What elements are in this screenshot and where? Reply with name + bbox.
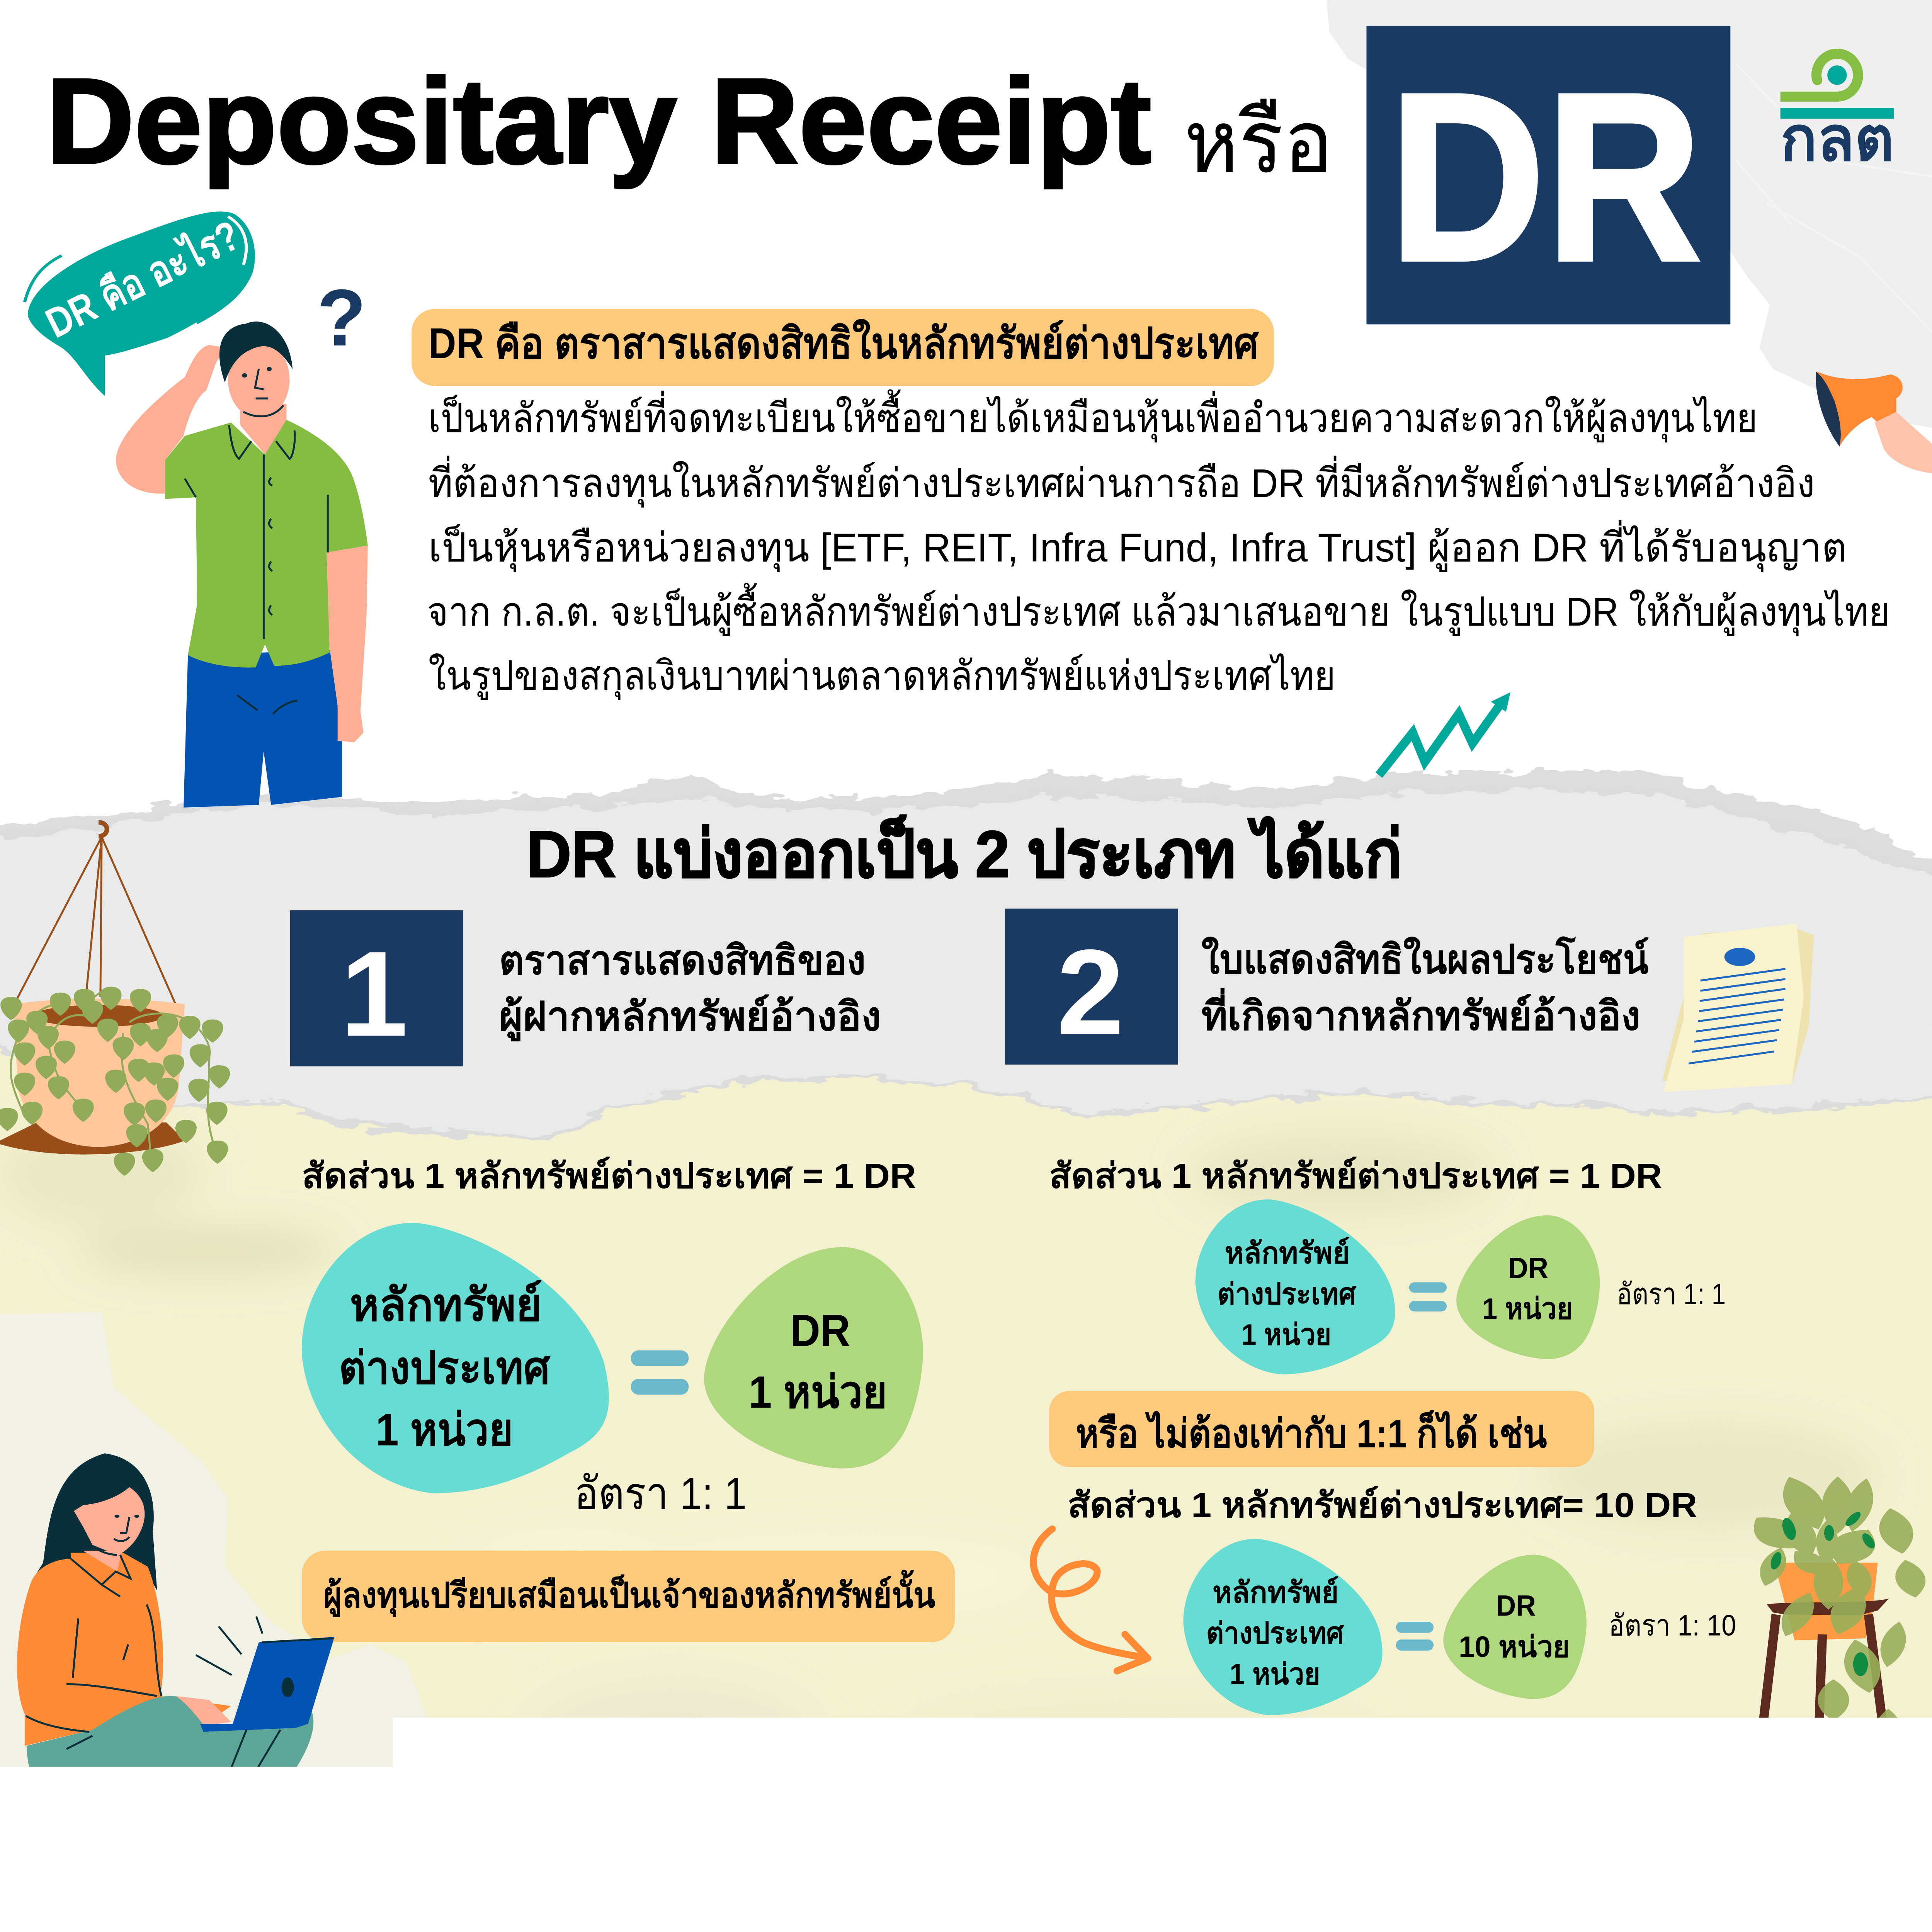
- type 2: ใบแสดงสิทธิในผลประโยชน์: [1201, 936, 1649, 982]
- blob: foreign security: ต่างประเทศ: [1206, 1617, 1344, 1650]
- blob: DR: DR: [790, 1305, 850, 1356]
- icon: facebook: [737, 1878, 774, 1925]
- equals sign: [1409, 1282, 1447, 1311]
- title: Depositary Receipt: [46, 53, 1151, 190]
- definition paragraph: เป็นหลักทรัพย์ที่จดทะเบียนให้ซื้อขายได้เหมือนหุ้นเพื่ออำนวยความสะดวกให้ผู้ลงทุนไทย: [429, 389, 1758, 443]
- type 2: [1005, 909, 1649, 1065]
- character: woman with laptop: [17, 1453, 335, 1869]
- footer bar: [11, 1872, 1921, 1932]
- ratio label: อัตรา 1: 10: [1609, 1609, 1736, 1642]
- type 2: ที่เกิดจากหลักทรัพย์อ้างอิง: [1201, 988, 1641, 1039]
- SEC logo: กลต: [1781, 105, 1894, 174]
- large diagram: 1 security = 1 DR: [302, 1223, 923, 1519]
- icon: facebook: f: [747, 1878, 761, 1925]
- footer: hotline: 1207: [1811, 1885, 1880, 1921]
- heading pill: what is DR: DR คือ ตราสารแสดงสิทธิในหลักทรัพย์ต่างประเทศ: [429, 319, 1259, 367]
- blob: foreign security: [1183, 1539, 1383, 1715]
- icon: potted plant on stand: [1741, 1473, 1930, 1877]
- definition paragraph: [427, 389, 1890, 701]
- blob: foreign security: 1 หน่วย: [1242, 1318, 1331, 1351]
- icon: phone: [1770, 1888, 1794, 1915]
- callout: or not 1:1: หรือ ไม่ต้องเท่ากับ 1:1 ก็ได้ เช่น: [1076, 1410, 1547, 1456]
- ratio label: อัตรา 1: 1: [574, 1468, 747, 1519]
- blob: DR: 1 หน่วย: [749, 1367, 887, 1417]
- type 1: ผู้ฝากหลักทรัพย์อ้างอิง: [499, 994, 881, 1042]
- type 1: ตราสารแสดงสิทธิของ: [499, 938, 866, 983]
- definition paragraph: ในรูปของสกุลเงินบาทผ่านตลาดหลักทรัพย์แห่งประเทศไทย: [429, 654, 1336, 701]
- small diagram: ratio 1:10: [1183, 1539, 1736, 1715]
- footer: website: www.smarttoinvest.com: [1386, 1887, 1752, 1920]
- definition paragraph: เป็นหุ้นหรือหน่วยลงทุน [ETF, REIT, Infra Fund, Infra Trust] ผู้ออก DR ที่ได้รับอนุญาต: [429, 520, 1847, 572]
- type 2: 2: [1056, 924, 1124, 1060]
- ratio heading left: สัดส่วน 1 หลักทรัพย์ต่างประเทศ = 1 DR: [302, 1156, 916, 1196]
- equals sign: [631, 1350, 689, 1395]
- heading pill: what is DR: [412, 309, 1274, 386]
- footer: facebook page: สำนักงาน กลต.: [794, 1886, 958, 1918]
- SEC logo: [1781, 54, 1894, 174]
- callout: investor not owner: [967, 1720, 1862, 1845]
- callout: investor is like owner: [302, 1551, 955, 1642]
- blob: DR: 10 หน่วย: [1459, 1631, 1570, 1663]
- icon: growth arrow: [1379, 692, 1510, 775]
- footer: organisation name: สำนักงานคณะกรรมการกำกับหลักทรัพย์และตลาดหลักทรัพย์: [46, 1884, 691, 1916]
- blob: foreign security: หลักทรัพย์: [1225, 1236, 1350, 1270]
- blob: DR: DR: [1508, 1252, 1548, 1284]
- cream paper background: [0, 1040, 1932, 1932]
- torn grey paper band: [0, 770, 1932, 1139]
- definition paragraph: ที่ต้องการลงทุนในหลักทรัพย์ต่างประเทศผ่านการถือ DR ที่มีหลักทรัพย์ต่างประเทศอ้างอิง: [429, 456, 1815, 508]
- ratio heading right: สัดส่วน 1 หลักทรัพย์ต่างประเทศ = 1 DR: [1049, 1156, 1662, 1196]
- blob: foreign security: [1196, 1199, 1395, 1374]
- footer: start to invest: Start-to-invest: [1065, 1889, 1276, 1920]
- callout: investor is like owner: ผู้ลงทุนเปรียบเสมือนเป็นเจ้าของหลักทรัพย์นั้น: [323, 1570, 935, 1617]
- icon: document: [1662, 923, 1814, 1092]
- blob: DR: [704, 1247, 923, 1468]
- blob: DR: [1443, 1554, 1587, 1699]
- blob: foreign security: ต่างประเทศ: [339, 1343, 551, 1393]
- ratio label: อัตรา 1: 1: [1617, 1278, 1726, 1311]
- speech bubble: DR คือ อะไร?: [38, 211, 247, 347]
- blob: foreign security: 1 หน่วย: [376, 1404, 513, 1455]
- icon: facebook: f: [1018, 1878, 1032, 1925]
- megaphone with hand: [1816, 372, 1932, 473]
- crumpled paper: top right: [1327, 0, 1932, 428]
- blob: foreign security: 1 หน่วย: [1230, 1658, 1320, 1691]
- character: thinking man: [116, 321, 368, 808]
- title connector word: หรือ: [1184, 93, 1333, 190]
- blob: foreign security: หลักทรัพย์: [1213, 1576, 1338, 1609]
- section heading: two types: DR แบ่งออกเป็น 2 ประเภท ได้แก่: [527, 815, 1402, 891]
- type 1: [290, 910, 881, 1066]
- type 1: 1: [340, 926, 408, 1062]
- small diagram: ratio 1:1: [1196, 1199, 1726, 1374]
- icon: facebook: [1008, 1878, 1045, 1925]
- blob: foreign security: ต่างประเทศ: [1217, 1278, 1357, 1311]
- speech bubble: [25, 211, 255, 396]
- DR title box: DR: [1389, 43, 1702, 311]
- callout: or not 1:1: [1049, 1391, 1594, 1467]
- blob: DR: DR: [1496, 1589, 1536, 1622]
- callout: investor not owner: ผู้ลงทุนไม่ได้เป็นเจ้าของในหลักทรัพย์ แต่เป็นผู้ได้รับผลประโยชน์: [985, 1745, 1822, 1788]
- callout: investor not owner: ที่เกิดจากหลักทรัพย์นั้น เช่น เงินปันผล หุ้นเพิ่มทุน (ถ้ามี): [985, 1784, 1716, 1832]
- blob: foreign security: [302, 1223, 609, 1493]
- icon: globe: [1332, 1882, 1372, 1923]
- crumpled paper: bottom left: [0, 1312, 558, 1913]
- ratio heading: 10 DR: สัดส่วน 1 หลักทรัพย์ต่างประเทศ= 10 DR: [1068, 1486, 1697, 1525]
- blob: DR: 1 หน่วย: [1482, 1293, 1573, 1325]
- equals sign: [1396, 1622, 1434, 1651]
- curly arrow: [1033, 1529, 1148, 1671]
- icon: hanging plant: [0, 822, 230, 1176]
- blob: foreign security: หลักทรัพย์: [350, 1280, 542, 1330]
- blob: DR: [1456, 1215, 1600, 1359]
- question mark: ?: [317, 273, 366, 363]
